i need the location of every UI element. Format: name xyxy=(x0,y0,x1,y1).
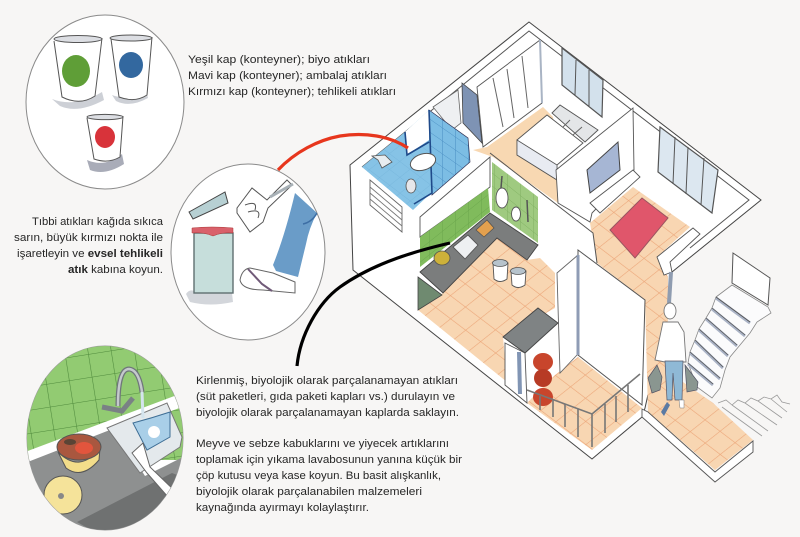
under counter cupboard xyxy=(418,277,442,310)
text: rinse and compost paragraphs: toplamak için yıkama lavabosunun yanına küçük bir xyxy=(196,454,462,466)
stair shadow hatch xyxy=(718,395,790,436)
bath kitchen partition xyxy=(420,157,490,237)
icon: blue bin xyxy=(110,35,152,104)
dark worktop xyxy=(30,430,181,526)
arrow: black connector to kitchen sink xyxy=(297,243,450,366)
panel: kitchen sink circle xyxy=(26,346,184,530)
top wall rim xyxy=(362,31,749,248)
text: rinse and compost paragraphs: kaynağında ayırmayı kolaylaştırır. xyxy=(196,502,369,514)
text: medical waste instruction: atık kabına koyun. xyxy=(68,264,163,276)
text: medical waste instruction: sarın, büyük kırmızı nokta ile xyxy=(14,232,163,244)
text: bin legend: Mavi kap (konteyner); ambalaj atıkları xyxy=(188,70,387,82)
front balcony parapet xyxy=(657,228,700,303)
text: rinse and compost paragraphs: (süt paketleri, gıda paketi kapları vs.) durulayın ve xyxy=(196,391,455,403)
wardrobe xyxy=(462,40,542,147)
text: rinse and compost paragraphs: Kirlenmiş, biyolojik olarak parçalanamayan atıkları xyxy=(196,375,458,387)
icon: blue cup xyxy=(133,412,170,450)
icon: pedal bin xyxy=(186,192,233,304)
staircase xyxy=(688,253,771,398)
rug xyxy=(610,198,668,258)
kitchen green tiles xyxy=(420,162,538,267)
central wall and door xyxy=(557,250,645,405)
worktop xyxy=(420,213,538,293)
bedroom floor xyxy=(473,107,558,203)
cabinet with grey top xyxy=(503,308,558,403)
circle outline xyxy=(26,15,184,189)
icon: green bin xyxy=(52,36,104,109)
bathroom mirror panel xyxy=(433,90,461,130)
kitchen utensils xyxy=(496,176,528,222)
balcony floor xyxy=(527,357,642,450)
icon: wrapped medical waste xyxy=(237,180,293,232)
icon: bowl of scraps xyxy=(57,434,101,472)
room partition wall xyxy=(556,108,634,222)
text: bin legend: Kırmızı kap (konteyner); tehlikeli atıkları xyxy=(188,86,396,98)
icon: leg with jeans and slipper xyxy=(240,193,317,293)
entrance landing edge xyxy=(642,409,753,482)
text: rinse and compost paragraphs: biyolojik olarak parçalanamayan kaplarda saklayın. xyxy=(196,407,459,419)
arrow: red connector to bathroom xyxy=(278,134,408,170)
red pots stack xyxy=(533,353,553,406)
panel: foot pedal bin circle xyxy=(171,164,325,340)
icon: red bin xyxy=(87,114,124,172)
wall picture and bench xyxy=(587,142,640,213)
kitchen right wall xyxy=(540,197,597,273)
circle background xyxy=(27,346,183,530)
bedroom window xyxy=(562,48,603,117)
text: bin legend xyxy=(188,54,396,98)
bed xyxy=(517,105,598,180)
kitchen floor xyxy=(418,238,555,382)
text: rinse and compost paragraphs: biyolojik olarak parçalanabilen malzemeleri xyxy=(196,486,422,498)
text: rinse and compost paragraphs: Meyve ve sebze kabuklarını ve yiyecek artıklarını xyxy=(196,438,449,450)
text: medical waste instruction xyxy=(14,216,164,276)
kitchen bins xyxy=(492,260,526,288)
illustration: isometric apartment xyxy=(350,22,790,482)
text: medical waste instruction: işaretleyin ve evsel tehlikeli xyxy=(17,248,163,260)
balcony railing xyxy=(527,374,640,447)
text: rinse and compost paragraphs: çöp kutusu veya kase koyun. Bu basit alışkanlık, xyxy=(196,470,441,482)
bathroom xyxy=(362,110,470,210)
text: rinse and compost paragraphs xyxy=(196,375,462,514)
circle outline xyxy=(171,164,325,340)
living room window xyxy=(658,127,718,213)
icon: faucet xyxy=(102,369,143,418)
green wall tiles xyxy=(27,346,183,460)
white splashback xyxy=(28,396,179,464)
man carrying trash bags xyxy=(648,303,698,416)
text: bin legend: Yeşil kap (konteyner); biyo atıkları xyxy=(188,54,370,66)
text: medical waste instruction: Tıbbi atıkları kağıda sıkıca xyxy=(32,216,164,228)
house shell xyxy=(350,22,761,459)
icon: gloved hand xyxy=(131,442,171,495)
sink xyxy=(107,403,182,473)
icon: bowl lid xyxy=(44,476,82,514)
louvre vent xyxy=(370,180,402,232)
panel: three coloured bins circle xyxy=(26,15,184,189)
living room and hall floor xyxy=(590,187,753,470)
